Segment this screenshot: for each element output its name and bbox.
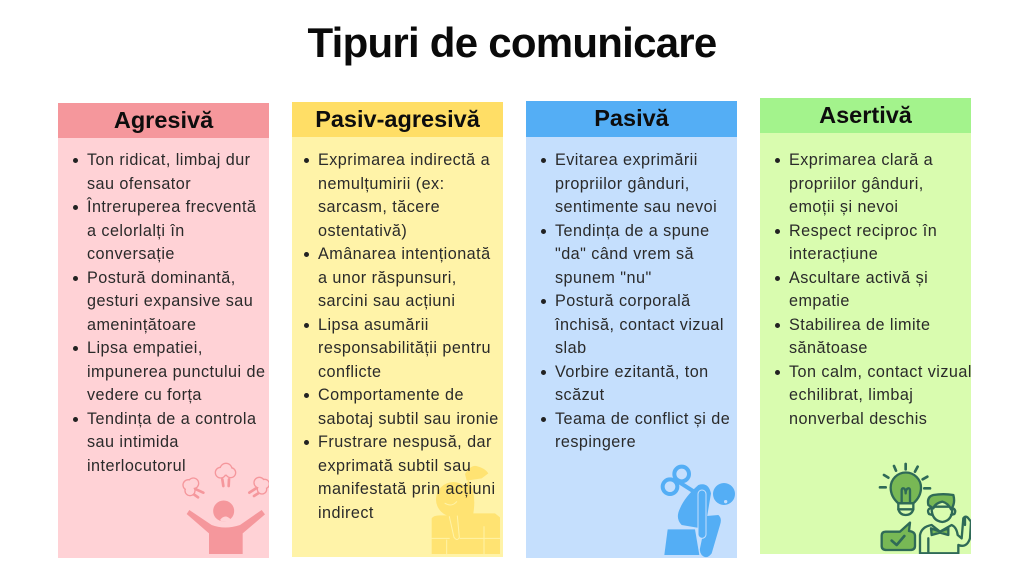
panel: Agresivă (58, 103, 269, 558)
text: Pasivă traits: Tendința de a spune (555, 222, 710, 240)
text: Agresivă traits: amenințătoare (87, 316, 196, 334)
text: Pasiv-agresivă traits: sarcasm, tăcere (318, 198, 440, 216)
heading: Pasivă (526, 101, 737, 137)
heading: Pasivă: Pasivă (594, 105, 669, 131)
text: Pasiv-agresivă traits: sarcini sau acțiuni (318, 292, 455, 310)
icon: wind-up figure (660, 464, 735, 558)
text: Pasiv-agresivă traits: Comportamente de (318, 386, 464, 404)
heading: Agresivă: Agresivă (114, 107, 213, 133)
text: Agresivă traits: interlocutorul (87, 456, 186, 474)
panel: Pasivă (526, 101, 737, 558)
heading: Agresivă (58, 103, 269, 138)
panel body: Pasivă (526, 137, 737, 558)
text: Agresivă traits: gesturi expansive sau (87, 292, 253, 310)
text: Pasiv-agresivă traits: Amânarea intenționată (318, 245, 491, 263)
text: Pasivă traits: Teama de conflict și de (555, 410, 730, 428)
text: Pasiv-agresivă traits: a unor răspunsuri, (318, 268, 457, 286)
text: Agresivă traits: Lipsa empatiei, (87, 339, 203, 357)
text: Pasivă traits: închisă, contact vizual (555, 316, 724, 334)
heading: Pasiv-agresivă: Pasiv-agresivă (315, 106, 480, 132)
text: Asertivă traits (775, 151, 971, 428)
panel body: Pasiv-agresivă (292, 137, 503, 557)
text: Asertivă traits: emoții și nevoi (789, 198, 898, 216)
text: Agresivă traits: Postură dominantă, (87, 268, 236, 286)
heading: Asertivă: Asertivă (819, 102, 912, 128)
text: Pasivă traits: respingere (555, 433, 636, 451)
text: Asertivă traits: echilibrat, limbaj (789, 386, 913, 404)
text: Pasiv-agresivă traits: Exprimarea indirectă a (318, 151, 490, 169)
text: Agresivă traits: Tendința de a controla (87, 410, 256, 428)
heading: Asertivă (760, 98, 971, 133)
text: Asertivă traits: propriilor gânduri, (789, 174, 924, 192)
text: Asertivă traits: Exprimarea clară a (789, 151, 933, 169)
title: Tipuri de comunicare (308, 19, 716, 66)
text: Agresivă traits: sau intimida (87, 433, 179, 451)
text: Agresivă traits: conversație (87, 245, 175, 263)
text: Asertivă traits: Stabilirea de limite (789, 316, 930, 334)
icon: thinking person with magnifier (432, 466, 500, 554)
text: Pasiv-agresivă traits: manifestată prin acțiuni (318, 480, 496, 498)
text: Asertivă traits: interacțiune (789, 245, 878, 263)
text: Agresivă traits: sau ofensator (87, 174, 191, 192)
text: Pasiv-agresivă traits: ostentativă) (318, 222, 407, 240)
text: Pasivă traits: Evitarea exprimării (555, 151, 698, 169)
text: Pasivă traits: spunem "nu" (555, 268, 652, 286)
heading: Pasiv-agresivă (292, 102, 503, 137)
text: Pasivă traits: propriilor gânduri, (555, 174, 690, 192)
panel: Pasiv-agresivă (292, 102, 503, 557)
text: Pasiv-agresivă traits: exprimată subtil sau (318, 456, 471, 474)
icon: angry person (182, 462, 269, 554)
text: Pasiv-agresivă traits: Frustrare nespusă, dar (318, 433, 492, 451)
text: Pasiv-agresivă traits: indirect (318, 504, 374, 522)
icon: lightbulb and person (878, 462, 971, 554)
text: Pasivă traits: Vorbire ezitantă, ton (555, 362, 709, 380)
text: Pasivă traits: sentimente sau nevoi (555, 198, 717, 216)
text: Asertivă traits: Respect reciproc în (789, 222, 937, 240)
panel body: Agresivă (58, 138, 269, 558)
text: Asertivă traits: Ascultare activă și (789, 268, 928, 286)
text: Pasiv-agresivă traits: nemulțumirii (ex: (318, 174, 445, 192)
text: Pasiv-agresivă traits: Lipsa asumării (318, 316, 429, 334)
text: Agresivă traits: vedere cu forța (87, 386, 202, 404)
text: Asertivă traits: Ton calm, contact vizual (789, 362, 971, 380)
text: Agresivă traits: a celorlalți în (87, 222, 185, 240)
text: Pasiv-agresivă traits: conflicte (318, 362, 382, 380)
text: Agresivă traits: impunerea punctului de (87, 362, 265, 380)
text: Pasivă traits (541, 151, 730, 451)
text: Agresivă traits (73, 151, 265, 474)
panel body: Asertivă (760, 133, 971, 554)
text: Asertivă traits: sănătoase (789, 339, 868, 357)
text: Pasivă traits: Postură corporală (555, 292, 691, 310)
text: Asertivă traits: empatie (789, 292, 850, 310)
text: Pasivă traits: "da" când vrem să (555, 245, 694, 263)
text: Pasiv-agresivă traits: sabotaj subtil sau ironie (318, 410, 499, 428)
panel: Asertivă (760, 98, 971, 554)
text: Pasivă traits: slab (555, 339, 587, 357)
text: Pasiv-agresivă traits: responsabilității pentru (318, 339, 491, 357)
text: Pasiv-agresivă traits (304, 151, 499, 522)
text: Pasivă traits: scăzut (555, 386, 605, 404)
text: Agresivă traits: Ton ridicat, limbaj dur (87, 151, 251, 169)
text: Agresivă traits: Întreruperea frecventă (87, 198, 256, 216)
text: Asertivă traits: nonverbal deschis (789, 410, 927, 428)
